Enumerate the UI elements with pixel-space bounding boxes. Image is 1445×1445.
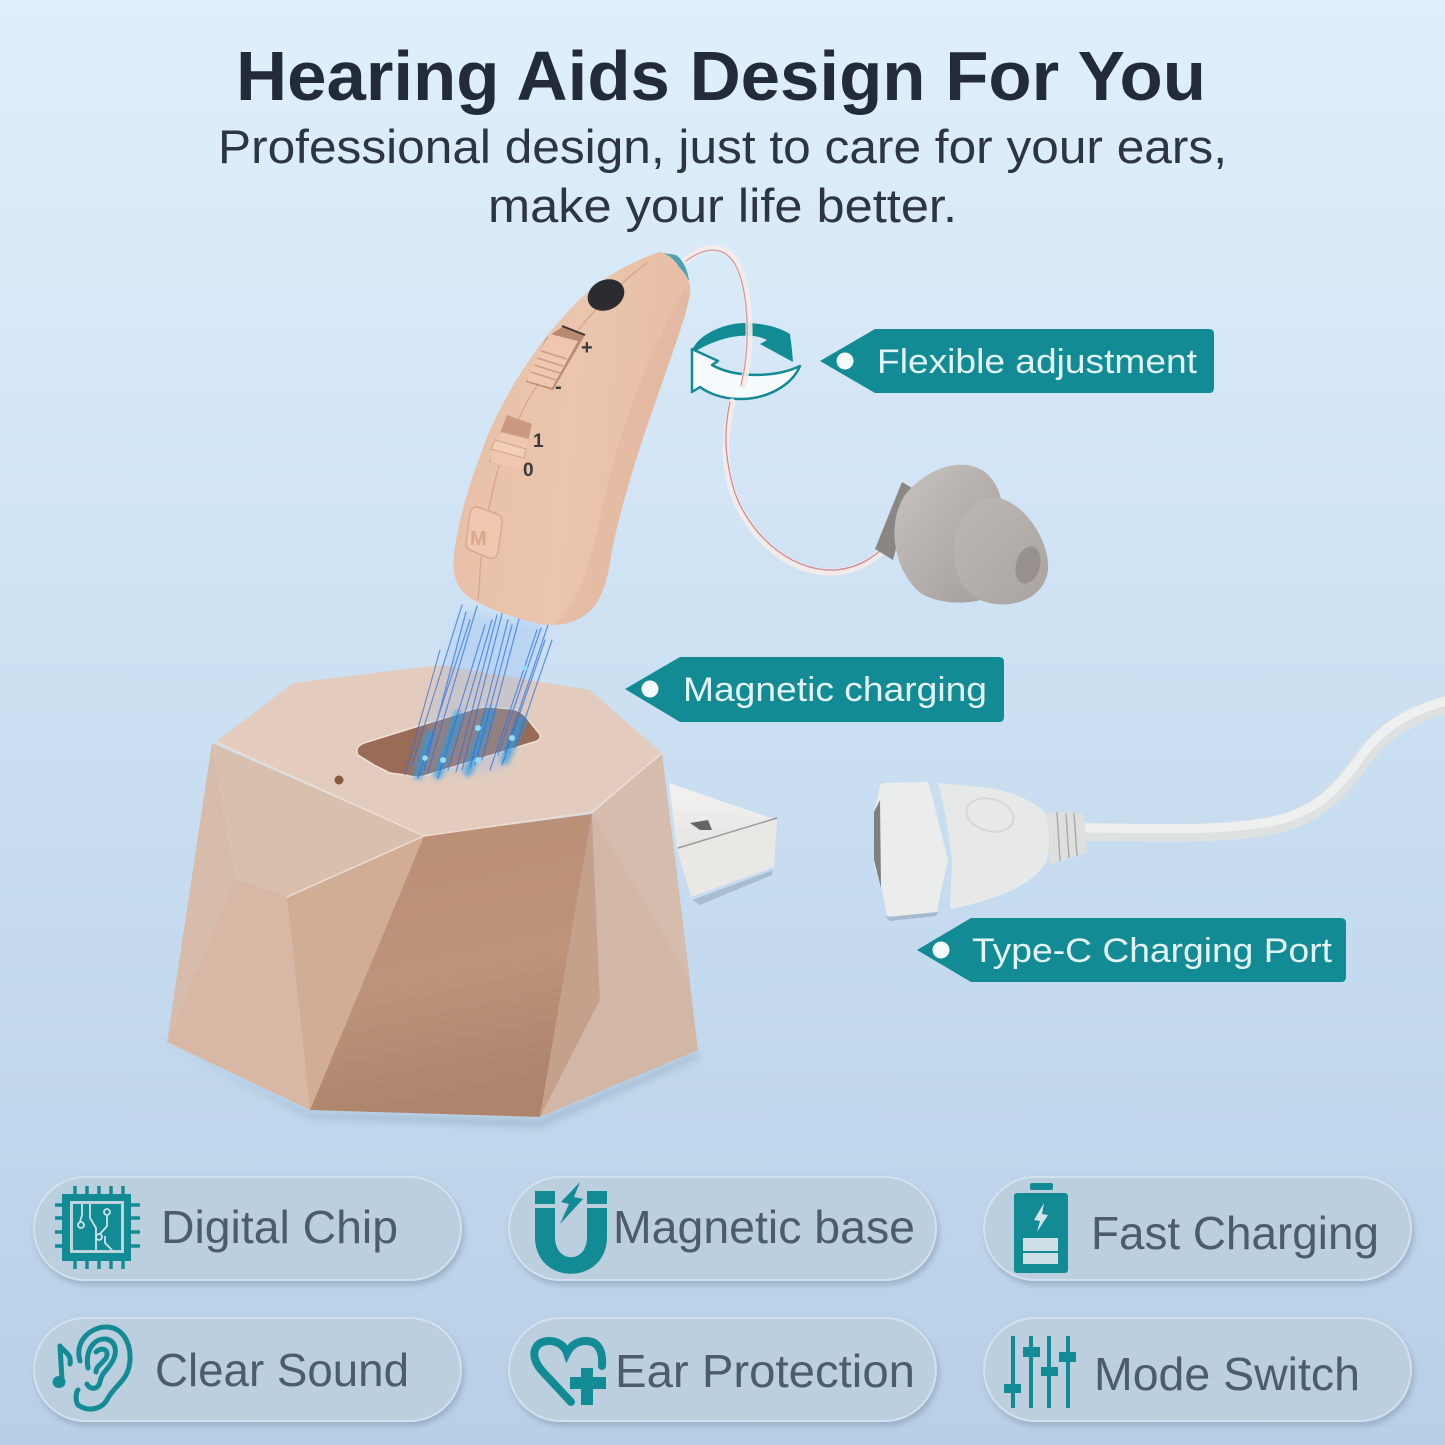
base shadow [167, 1044, 698, 1127]
feature: digital chip [34, 1177, 461, 1280]
usb plug [669, 783, 777, 905]
shell [453, 252, 690, 625]
subtitle: Professional design, just to care for your ears, [218, 120, 1227, 173]
usb extension cable [874, 700, 1445, 921]
feature: clear sound [34, 1318, 461, 1421]
small dome [954, 497, 1048, 604]
charging base [167, 665, 777, 1127]
icon: magnet [535, 1182, 607, 1274]
power switch: 0 [523, 460, 534, 481]
front light facet [287, 836, 424, 1110]
teal arrow [691, 323, 793, 362]
power switch [489, 415, 544, 481]
M button [466, 507, 502, 558]
top face [216, 665, 662, 836]
feature: mode switch: Mode Switch [1094, 1348, 1360, 1400]
magnetic field lines [405, 605, 552, 778]
feature: fast charging [984, 1177, 1411, 1280]
icon: ear with note [55, 1327, 130, 1409]
icon: sliders [1004, 1336, 1076, 1408]
hearing aid body [453, 252, 690, 625]
dome stem [875, 482, 912, 560]
ear dome [875, 465, 1048, 604]
M button: M [470, 528, 487, 550]
connector socket [874, 782, 948, 917]
teal ring [663, 253, 689, 282]
subtitle [218, 120, 1227, 232]
shell shading [555, 290, 690, 625]
feature: ear protection [509, 1318, 936, 1421]
left upper facet [212, 743, 424, 897]
connector logo [963, 793, 1017, 837]
feature: fast charging: Fast Charging [1091, 1207, 1379, 1259]
central right shaded facet [540, 814, 600, 1117]
feature: mode switch [984, 1318, 1411, 1421]
large dome [894, 465, 1003, 603]
central dark facet [310, 814, 592, 1117]
strain relief [1044, 812, 1087, 864]
label: type-c charging port: Type-C Charging Port [972, 932, 1333, 970]
indicator light [334, 776, 344, 784]
label: flexible adjustment: Flexible adjustment [877, 343, 1198, 381]
icon: chip [55, 1186, 140, 1269]
label: flexible adjustment [820, 329, 1214, 393]
rotate arrows icon [691, 323, 800, 399]
icon: battery [1014, 1183, 1068, 1273]
icon: heart plus [534, 1341, 606, 1405]
volume wheel: - [555, 376, 562, 398]
feature: magnetic base [509, 1177, 936, 1280]
hearing aid wire [684, 248, 890, 572]
edge highlights [216, 742, 662, 897]
seam [478, 262, 648, 600]
feature: ear protection: Ear Protection [615, 1345, 915, 1397]
white arrow [692, 349, 800, 399]
charging slot [357, 707, 540, 777]
left lower facet [167, 878, 310, 1110]
connector body [938, 783, 1049, 909]
label: magnetic charging [625, 657, 1004, 722]
right facet [540, 753, 698, 1117]
feature: magnetic base: Magnetic base [613, 1201, 915, 1253]
subtitle: make your life better. [488, 179, 957, 232]
volume wheel [526, 326, 593, 398]
label: magnetic charging: Magnetic charging [683, 671, 987, 709]
dome opening [1011, 544, 1045, 586]
cable [1084, 704, 1445, 833]
volume wheel: + [581, 337, 593, 359]
power switch: 1 [533, 431, 544, 452]
far left facet [167, 743, 235, 1042]
microphone button [582, 273, 630, 317]
title: Hearing Aids Design For You [236, 37, 1206, 115]
feature: clear sound: Clear Sound [155, 1344, 409, 1396]
right edge facet [592, 753, 690, 980]
feature: digital chip: Digital Chip [161, 1201, 398, 1253]
label: type-c charging port [917, 918, 1346, 982]
